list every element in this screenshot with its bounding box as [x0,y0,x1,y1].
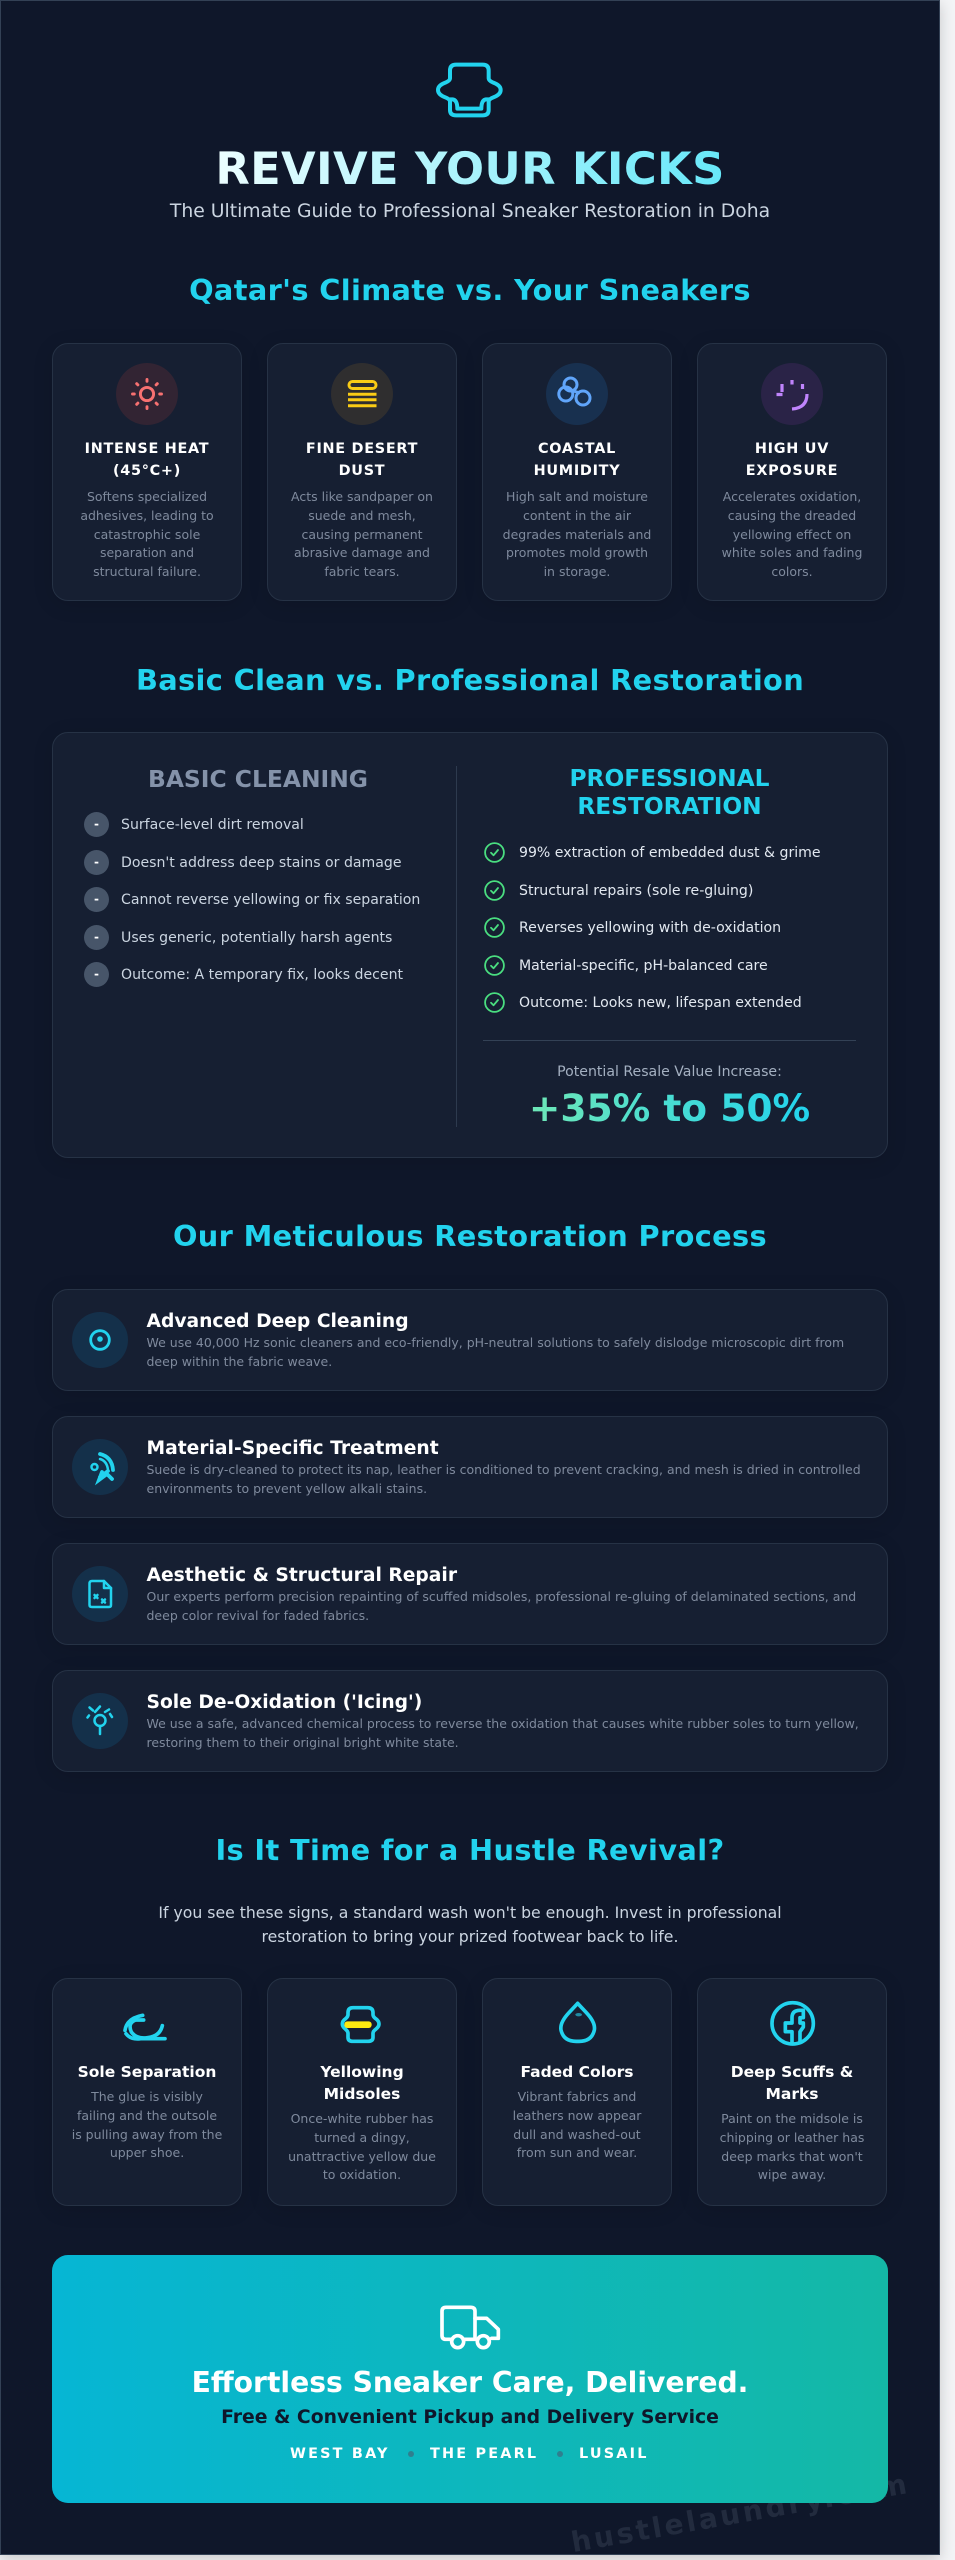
card title: EXPOSURE [746,463,838,479]
card title: HIGH UV [755,441,829,457]
step: sole de-oxidation [52,1670,888,1772]
basic item 4: - [94,930,99,944]
panel: delivery call to action [52,2255,888,2503]
card title: Faded Colors [520,2063,634,2081]
card title: HUMIDITY [534,463,620,479]
panel: comparison [52,732,888,1158]
professional item 5 [484,992,802,1013]
subtitle: The Ultimate Guide to Professional Sneaker Restoration in Doha [170,201,770,222]
professional item 2: Structural repairs (sole re-gluing) [519,883,753,899]
separator dot [408,2451,414,2457]
card title: INTENSE HEAT [85,441,209,457]
card text: content in the air [523,508,631,523]
card title: Sole Separation [78,2063,216,2081]
card title [731,2063,853,2103]
card title: Marks [765,2085,819,2103]
step text: We use 40,000 Hz sonic cleaners and eco-friendly, pH-neutral solutions to safely dislodge microscopic dirt from [146,1335,844,1350]
card text: catastrophic sole [94,526,200,542]
card text: is pulling away from the [72,2126,222,2142]
card text: suede and mesh, [308,508,416,523]
card title [85,441,209,479]
professional item 2 [484,880,753,901]
step title: Material-Specific Treatment [146,1438,439,1459]
basic item 4: Uses generic, potentially harsh agents [121,930,392,946]
icon: sneaker logo [436,62,503,118]
step text: Our experts perform precision repainting of scuffed midsoles, professional re-gluing of delaminated sections, and [146,1589,856,1604]
basic item 3: - [94,892,99,906]
icon: target [72,1312,128,1368]
heading: process: Our Meticulous Restoration Process [173,1219,767,1253]
step text: We use a safe, advanced chemical process to reverse the oxidation that causes white rubber soles to turn yellow, [146,1716,859,1731]
card text: unattractive yellow due [288,2148,436,2164]
panel: intense heat [52,343,242,601]
card text [288,2111,436,2182]
card title: FINE DESERT [306,441,418,457]
basic item 5 [84,962,403,987]
professional item 5: Outcome: Looks new, lifespan extended [519,995,802,1011]
step: material-specific treatment [52,1416,888,1518]
location: the pearl: THE PEARL [430,2446,538,2462]
step text [146,1462,861,1496]
card text [291,489,433,579]
card text: Accelerates oxidation, [723,489,861,504]
step title: Sole De-Oxidation ('Icing') [146,1692,422,1713]
icon: scuffed circle [770,2000,816,2046]
basic item 1 [84,812,304,837]
basic item 4 [84,925,392,950]
panel: sole separation [52,1978,242,2206]
location: west bay: WEST BAY [290,2446,390,2462]
basic item 5: - [94,967,99,981]
card text: fabric tears. [324,564,400,579]
icon: delivery truck [440,2306,500,2350]
cta subheading: Free & Convenient Pickup and Delivery Service [221,2407,719,2428]
icon: dust layers [331,363,393,425]
icon: sun [116,363,178,425]
heading: climate: Qatar's Climate vs. Your Sneakers [189,273,751,307]
card text: failing and the outsole [77,2108,217,2123]
card text: turned a dingy, [314,2130,410,2145]
panel: faded colors [482,1978,672,2206]
basic item 2 [84,850,402,875]
service locations [281,2441,661,2465]
step text: deep within the fabric weave. [146,1354,332,1369]
basic item 2: - [94,855,99,869]
card title [746,441,838,479]
step text: environments to prevent yellow alkali stains. [146,1481,427,1496]
professional restoration column [483,765,856,1130]
card text: causing permanent [301,526,423,542]
card text [503,489,651,579]
card text: degrades materials and [503,526,651,542]
intro paragraph: If you see these signs, a standard wash won't be enough. Invest in professional [158,1903,782,1922]
panel: fine desert dust [267,343,457,601]
card text: upper shoe. [110,2145,184,2160]
resale value: +35% to 50% [529,1086,810,1130]
card text: Softens specialized [87,489,207,504]
card text: wipe away. [758,2167,826,2182]
card text: separation and [100,545,194,560]
basic item 5: Outcome: A temporary fix, looks decent [121,967,403,983]
basic item 3 [84,887,420,912]
card title [320,2063,404,2103]
professional heading: PROFESSIONAL [569,765,770,792]
basic cleaning heading: BASIC CLEANING [148,765,368,793]
icon: drop [559,2001,596,2044]
card text: Once-white rubber has [291,2111,433,2126]
professional heading: RESTORATION [577,793,762,820]
card text: abrasive damage and [294,545,430,560]
card text: from sun and wear. [517,2145,637,2160]
professional item 1 [484,842,821,863]
card text: Vibrant fabrics and [518,2089,636,2104]
card title: (45°C+) [113,463,181,479]
step text: restoring them to their original bright white state. [146,1735,459,1750]
step title: Advanced Deep Cleaning [146,1311,409,1332]
icon: yellowed shoe [340,2006,381,2044]
step title: Aesthetic & Structural Repair [146,1565,457,1586]
card text [513,2089,642,2160]
card text [80,489,214,579]
card title: Yellowing [320,2063,404,2081]
step text [146,1335,844,1369]
panel: coastal humidity [482,343,672,601]
icon: uv rays [761,363,823,425]
card title: Midsoles [324,2085,400,2103]
professional item 1: 99% extraction of embedded dust & grime [519,845,821,861]
professional item 4 [484,955,768,976]
card text: adhesives, leading to [80,508,214,523]
title: REVIVE YOUR KICKS [215,142,725,195]
resale label: Potential Resale Value Increase: [557,1064,782,1080]
professional item 4: Material-specific, pH-balanced care [519,958,768,974]
intro paragraph [158,1903,782,1946]
heading: comparison: Basic Clean vs. Professional Restoration [136,663,804,697]
basic item 3: Cannot reverse yellowing or fix separation [121,892,420,908]
basic item 2: Doesn't address deep stains or damage [121,855,402,871]
icon: treatment [72,1439,128,1495]
card text: chipping or leather has [720,2130,864,2145]
panel: deep scuffs and marks [697,1978,887,2206]
card text: leathers now appear [513,2108,641,2123]
card title: DUST [339,463,385,479]
card text: causing the dreaded [728,508,856,523]
icon: light rays [72,1693,128,1749]
step text: deep color revival for faded fabrics. [146,1608,369,1623]
card text: in storage. [544,564,610,579]
panel: yellowing midsoles [267,1978,457,2206]
card text [722,489,862,579]
step text [146,1589,856,1623]
basic item 1: - [94,817,99,831]
icon: water molecules [546,363,608,425]
divider column: basic cleaning [84,765,420,987]
cta heading: Effortless Sneaker Care, Delivered. [192,2366,748,2399]
card title: COASTAL [538,441,616,457]
basic item 1: Surface-level dirt removal [121,817,304,833]
separator dot [557,2451,563,2457]
card text: white soles and fading [722,545,862,560]
icon: peeling sole [123,2014,167,2041]
card title: Deep Scuffs & [731,2063,853,2081]
card text: promotes mold growth [506,545,648,560]
heading: signs: Is It Time for a Hustle Revival? [215,1833,725,1867]
card text: structural failure. [93,564,201,579]
intro paragraph: restoration to bring your prized footwear back to life. [262,1927,678,1946]
step text: Suede is dry-cleaned to protect its nap, leather is conditioned to prevent cracking, and mesh is dried in controlled [146,1462,861,1477]
card text: to oxidation. [323,2167,401,2182]
card text: Paint on the midsole is [721,2111,863,2126]
card text: dull and washed-out [513,2126,641,2142]
step: advanced deep cleaning [52,1289,888,1391]
icon: file [72,1566,128,1622]
card text: High salt and moisture [506,489,648,504]
card text: deep marks that won't [721,2148,863,2164]
card title [534,441,620,479]
professional item 3: Reverses yellowing with de-oxidation [519,920,781,936]
card text [72,2089,222,2160]
step: aesthetic and structural repair [52,1543,888,1645]
card text: colors. [771,564,813,579]
card text [720,2111,864,2182]
card text: yellowing effect on [733,526,851,542]
panel: high uv exposure [697,343,887,601]
card title [306,441,418,479]
card text: The glue is visibly [91,2089,203,2104]
card text: Acts like sandpaper on [291,489,433,504]
step text [146,1716,859,1750]
professional heading [569,765,770,820]
location: lusail: LUSAIL [579,2446,649,2462]
professional item 3 [484,917,781,938]
